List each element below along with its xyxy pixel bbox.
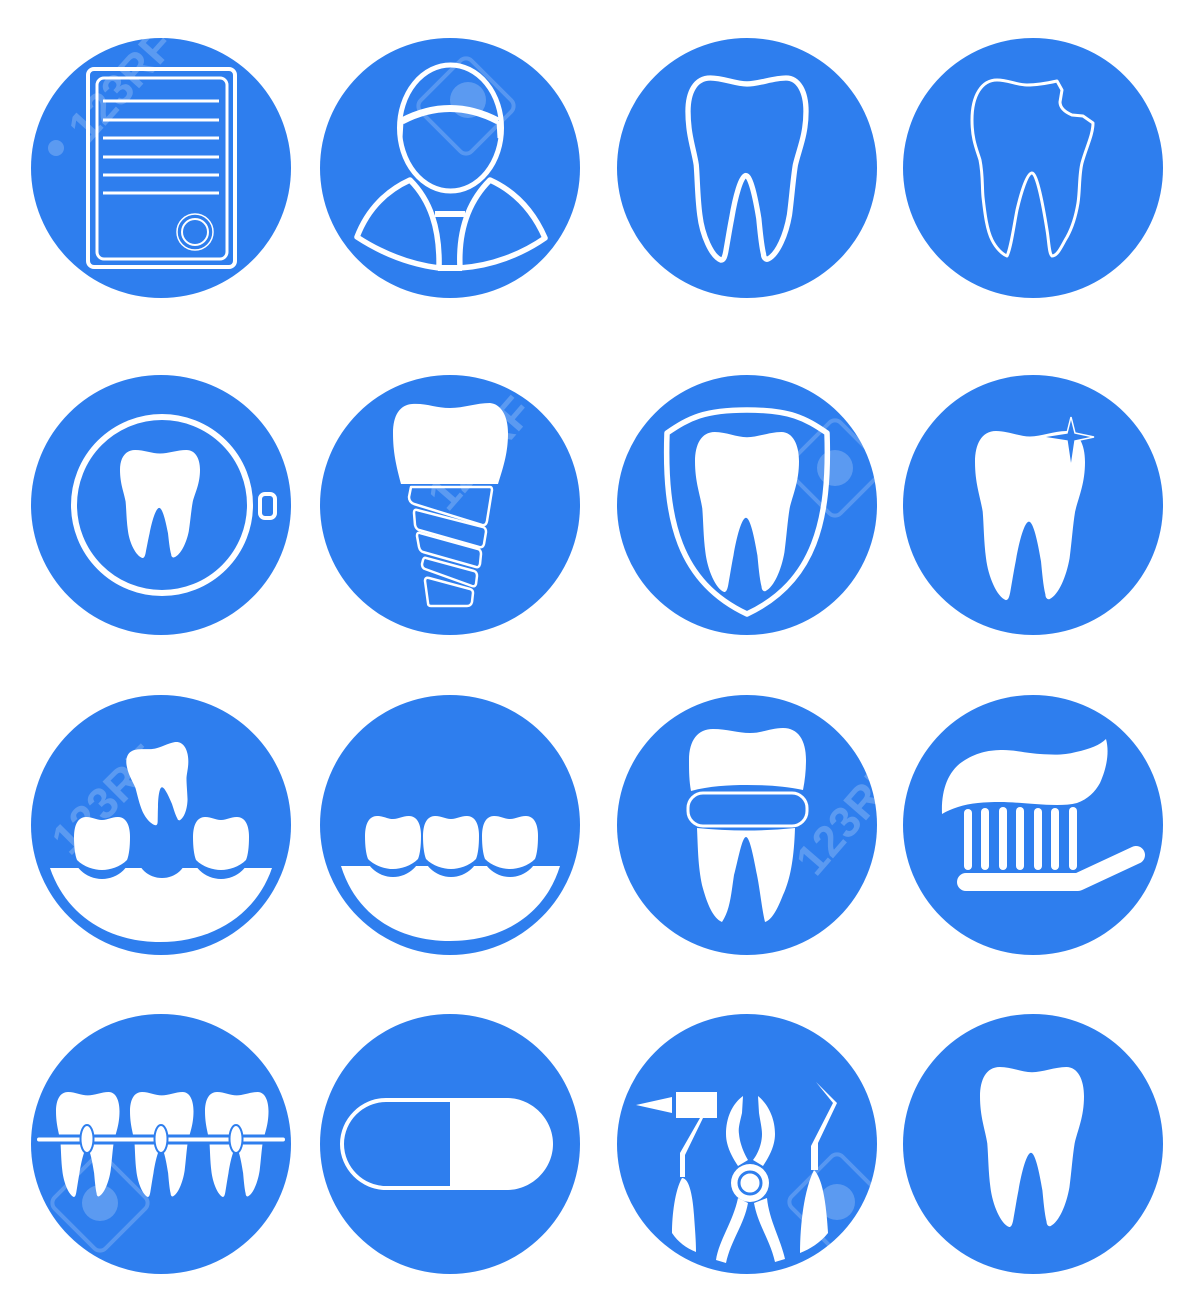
icon: toothbrush with paste — [903, 695, 1163, 955]
icon: dental tools — [617, 1014, 877, 1274]
icon: capsule — [320, 1014, 580, 1274]
icon: row of teeth — [320, 695, 580, 955]
icon: tooth in dental mirror — [31, 375, 291, 635]
icon: dentist — [320, 38, 580, 298]
icon: dental crown — [617, 695, 877, 955]
icon: certificate document — [31, 38, 291, 298]
icon: tooth extraction — [31, 695, 291, 955]
watermarks: 123RF — [419, 388, 542, 520]
watermarks: 123RF — [59, 21, 184, 152]
icon: sparkling tooth — [903, 375, 1163, 635]
watermarks: 123RF — [787, 753, 910, 885]
watermarks — [42, 21, 910, 1254]
icon: solid tooth — [903, 1014, 1163, 1274]
icon: dental implant — [320, 375, 580, 635]
icon: shielded tooth — [617, 375, 877, 635]
watermarks: 123RF — [42, 736, 170, 864]
icon: decayed tooth — [903, 38, 1163, 298]
icon: tooth outline — [617, 38, 877, 298]
icon: braces — [31, 1014, 291, 1274]
